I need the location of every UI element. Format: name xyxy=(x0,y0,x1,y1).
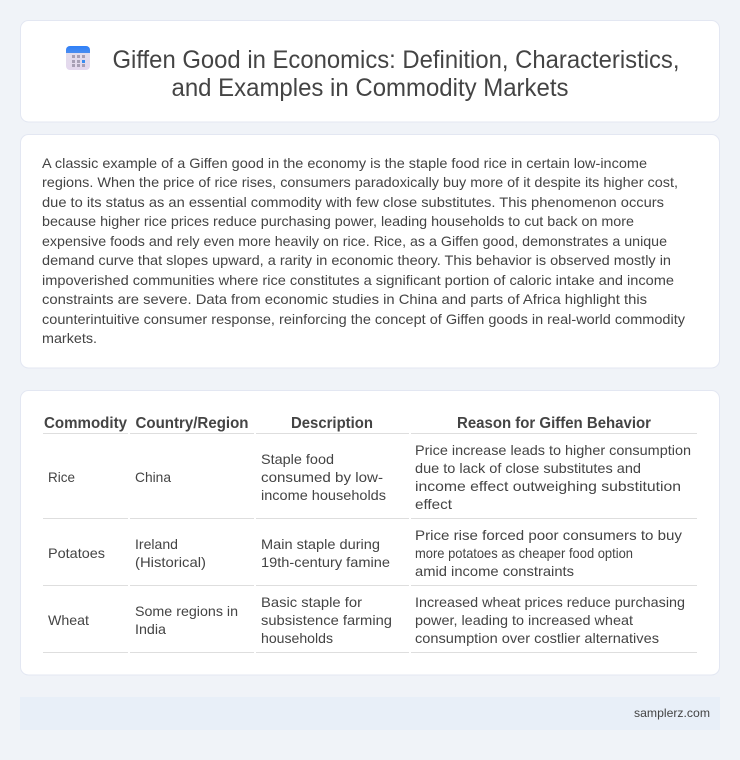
table row: potatoes: (Historical) xyxy=(135,554,206,570)
table row: potatoes: 19th-century famine xyxy=(261,554,390,570)
text block: paragraph: impoverished communities where rice constitutes a significant portion of caloric intake and income xyxy=(42,272,674,288)
footer credit: samplerz.com xyxy=(634,706,710,720)
table row: rice: Rice xyxy=(48,469,75,485)
heading: title xyxy=(112,46,680,102)
table row: potatoes: Price rise forced poor consumers to buy xyxy=(415,527,682,543)
table row: wheat: Increased wheat prices reduce purchasing xyxy=(415,594,685,610)
table row: wheat: Basic staple for xyxy=(261,594,362,610)
table header row: Reason for Giffen Behavior xyxy=(457,415,651,432)
table row: potatoes: Ireland xyxy=(135,536,178,552)
text block: paragraph: markets. xyxy=(42,330,97,346)
text block: paragraph: counterintuitive consumer response, reinforcing the concept of Giffen goods in real-world commodity xyxy=(42,311,685,327)
panel: title card xyxy=(20,20,720,122)
table row: rice: consumed by low- xyxy=(261,469,383,485)
table row: wheat: power, leading to increased wheat xyxy=(415,612,633,628)
table rules xyxy=(43,434,697,652)
table row: rice: effect xyxy=(415,496,452,512)
table row: wheat: Wheat xyxy=(48,612,89,628)
table row: rice: due to lack of close substitutes and xyxy=(415,460,641,476)
table row: rice: Staple food xyxy=(261,451,334,467)
table row: rice: Price increase leads to higher consumption xyxy=(415,442,691,458)
table header row xyxy=(44,415,651,432)
text block: paragraph: A classic example of a Giffen good in the economy is the staple food rice in certain low-income xyxy=(42,155,647,171)
table header row: Commodity xyxy=(44,415,127,432)
panel: explanatory paragraph xyxy=(20,134,720,368)
table row: rice: China xyxy=(135,469,171,485)
footer bar xyxy=(20,697,720,730)
table row: rice: income households xyxy=(261,487,386,503)
table row: wheat xyxy=(48,594,685,646)
table row: potatoes: more potatoes as cheaper food option xyxy=(415,545,633,561)
text block: paragraph: constraints are severe. Data from economic studies in China and parts of Africa highlight this xyxy=(42,291,647,307)
table row: potatoes xyxy=(48,527,682,579)
table row: wheat: households xyxy=(261,630,333,646)
text block: paragraph: regions. When the price of rice rises, consumers paradoxically buy more of it despite its higher cost, xyxy=(42,174,678,190)
text block: paragraph xyxy=(42,155,685,346)
table row: wheat: India xyxy=(135,621,166,637)
table row: rice xyxy=(48,442,691,512)
heading: title: and Examples in Commodity Markets xyxy=(172,74,568,102)
text block: paragraph: because higher rice prices reduce purchasing power, leading households to cut back on more xyxy=(42,213,634,229)
text block: paragraph: demand curve that slopes upward, a rarity in economic theory. This behavior is observed mostly in xyxy=(42,252,671,268)
table row: potatoes: Potatoes xyxy=(48,545,105,561)
panel: commodity table xyxy=(20,390,720,675)
table header row: Country/Region xyxy=(136,415,248,432)
icon: calendar xyxy=(66,46,90,70)
table row: potatoes: amid income constraints xyxy=(415,563,574,579)
table row: wheat: subsistence farming xyxy=(261,612,392,628)
table header row: Description xyxy=(291,415,373,432)
table row: potatoes: Main staple during xyxy=(261,536,380,552)
text block: paragraph: due to its status as an essential commodity with few close substitutes. This phenomenon occurs xyxy=(42,194,664,210)
text block: paragraph: expensive foods and rely even more heavily on rice. Rice, as a Giffen good, demonstrates a unique xyxy=(42,233,667,249)
heading: title: Giffen Good in Economics: Definition, Characteristics, xyxy=(112,46,680,74)
table row: wheat: Some regions in xyxy=(135,603,238,619)
table row: wheat: consumption over costlier alternatives xyxy=(415,630,659,646)
table row: rice: income effect outweighing substitution xyxy=(415,478,681,494)
